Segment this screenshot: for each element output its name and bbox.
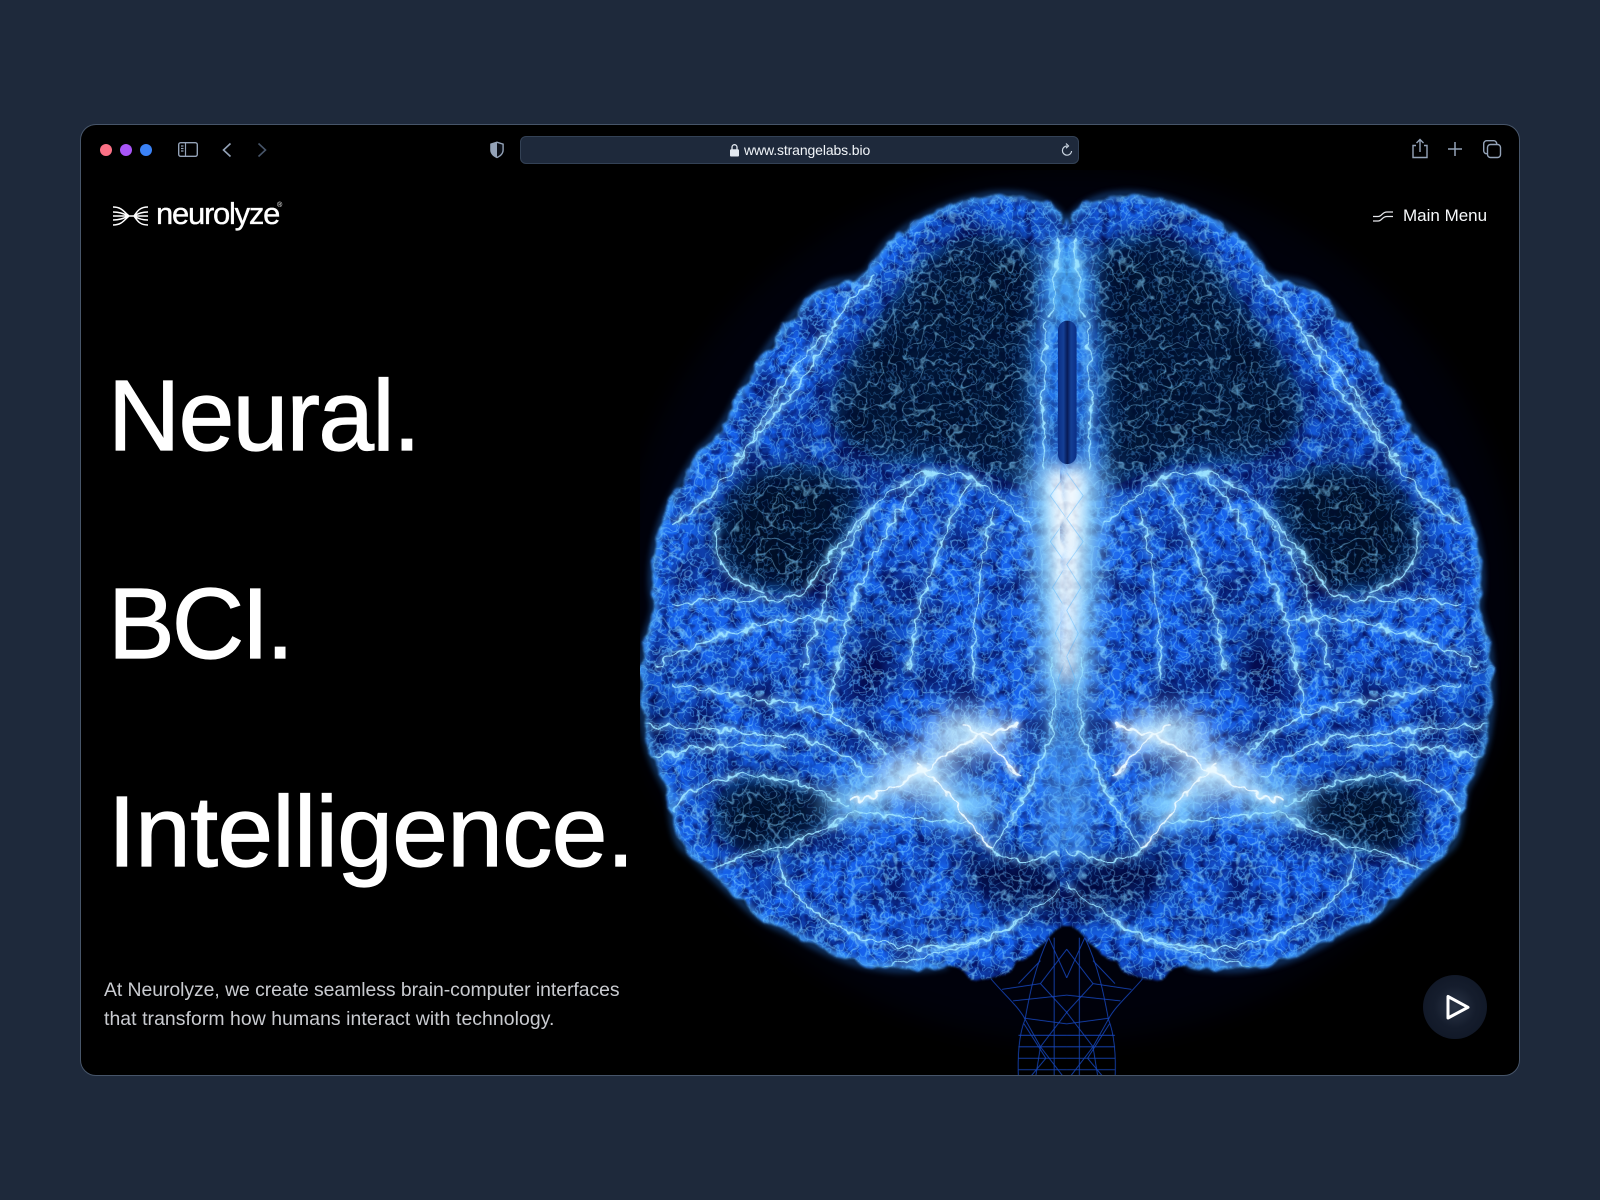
icon: sidebar xyxy=(178,142,198,157)
browser window xyxy=(80,124,1520,1076)
icon: tabs xyxy=(1483,140,1502,158)
traffic light dots xyxy=(100,144,152,156)
icon: neuron mark xyxy=(113,206,148,226)
address bar xyxy=(520,136,1079,164)
description text xyxy=(104,979,619,1030)
icon: new tab plus xyxy=(1448,142,1462,156)
description text: At Neurolyze, we create seamless brain-computer interfaces xyxy=(104,979,619,1001)
logo xyxy=(113,196,282,231)
icon: back chevron xyxy=(222,142,231,158)
play button xyxy=(1423,975,1487,1039)
icon: privacy shield xyxy=(490,142,504,158)
icon: lock xyxy=(730,144,739,156)
brain illustration xyxy=(640,180,1506,1075)
heading: Neural: Neural. xyxy=(108,360,419,472)
central slit xyxy=(1058,321,1077,464)
icon: share xyxy=(1412,138,1428,158)
icon: menu waves xyxy=(1373,211,1393,222)
heading: Intelligence: Intelligence. xyxy=(108,776,634,888)
main menu xyxy=(1373,206,1487,225)
url text: www.strangelabs.bio xyxy=(744,142,870,158)
heading: BCI: BCI. xyxy=(108,568,291,680)
icon: play triangle xyxy=(1446,994,1470,1020)
icon: forward chevron xyxy=(258,143,266,157)
wordmark: neurolyze® xyxy=(156,196,282,231)
menu label: Main Menu xyxy=(1403,206,1487,225)
description text: that transform how humans interact with technology. xyxy=(104,1008,554,1030)
icon: reload xyxy=(1062,143,1072,156)
